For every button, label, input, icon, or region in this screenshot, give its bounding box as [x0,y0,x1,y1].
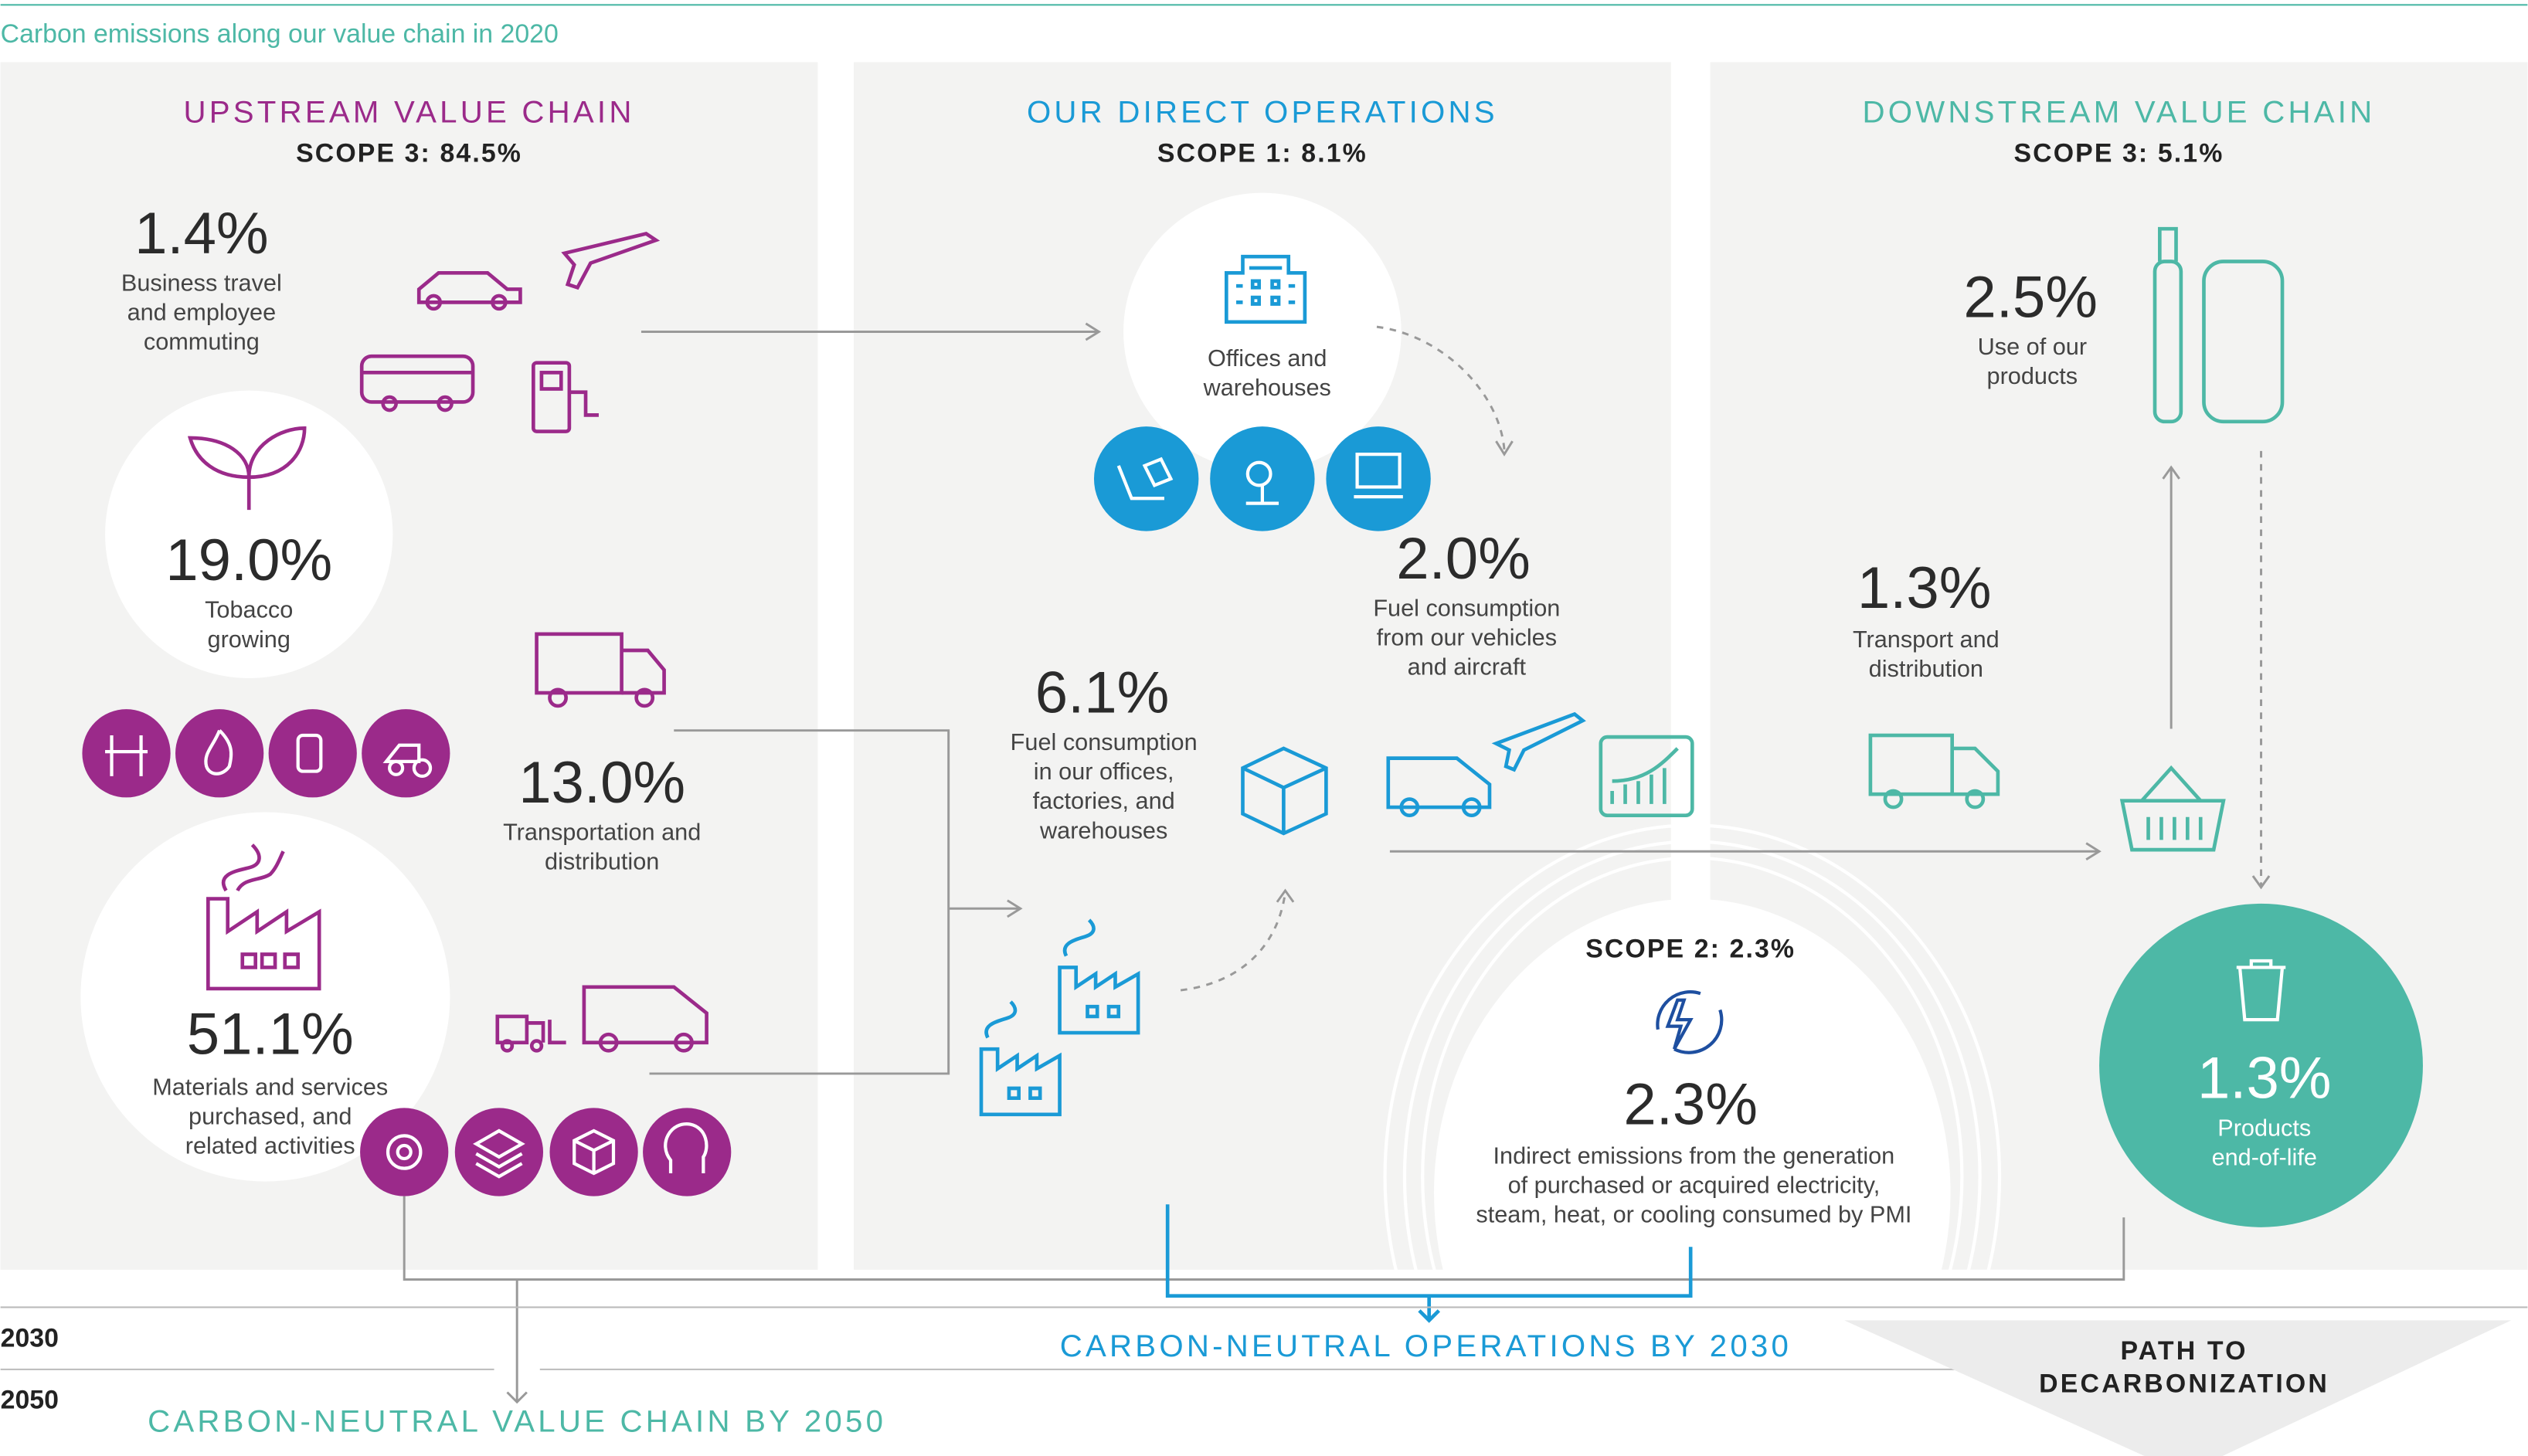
heading: upstream: UPSTREAM VALUE CHAIN [183,95,635,130]
stat: transport downstream: distribution [1869,656,1983,682]
path to decarbonization: DECARBONIZATION [2039,1369,2329,1398]
stat: fuel offices: factories, and [1033,788,1175,814]
circle: tobacco growing: 19.0% [165,528,332,593]
stat: transportation: 13.0% [518,750,685,816]
stat: fuel offices: in our offices, [1034,759,1174,785]
stat: business travel: and employee [127,300,276,326]
stat: fuel vehicles: and aircraft [1408,654,1526,680]
stat: business travel: commuting [144,329,260,355]
blue bracket to 2030 [1167,1204,1690,1320]
circle: offices: warehouses [1203,375,1331,401]
circle: end of life: Products [2217,1115,2311,1141]
heading: downstream: DOWNSTREAM VALUE CHAIN [1862,95,2375,130]
connector lines [650,731,1021,1074]
scope 2 text: 2.3% [1623,1072,1758,1138]
circle: materials: 51.1% [187,1002,354,1067]
stat: fuel vehicles: from our vehicles [1377,625,1557,651]
stat: fuel offices [1011,660,1198,843]
arrows downstream [2163,451,2269,888]
icons: vehicles small [498,987,707,1050]
stat: fuel vehicles: Fuel consumption [1373,596,1560,622]
heading: upstream [183,95,635,168]
scope 2 text: Indirect emissions from the generation [1493,1142,1894,1169]
icon: device [2155,229,2282,422]
stat: business travel: 1.4% [134,201,269,266]
circle: end of life: 1.3% [2197,1046,2332,1112]
circle: materials: purchased, and [189,1104,352,1130]
year labels [1,1323,59,1415]
stat: use of products [1963,264,2098,389]
heading: direct [1027,95,1498,168]
circle: tobacco growing [105,391,392,678]
icons: farming circles [82,709,450,797]
circle: tobacco growing: Tobacco [205,597,293,623]
path to decarbonization [1844,1320,2511,1456]
heading: direct: OUR DIRECT OPERATIONS [1027,95,1498,130]
scope 2 text [1476,935,1911,1227]
icon: basket [2122,768,2224,850]
scope 2 text: SCOPE 2: 2.3% [1585,935,1796,964]
arrow: travel to offices [641,324,1099,340]
dashed arrow factories [1181,891,1293,990]
year labels: 2050 [1,1386,59,1415]
stat: transport downstream [1853,555,2000,682]
panel: downstream [1711,62,2527,1270]
title: Carbon emissions along our value chain in 2020 [1,19,559,49]
heading: downstream [1862,95,2375,168]
path to decarbonization: PATH TO [2121,1336,2248,1366]
goal 2030: CARBON-NEUTRAL OPERATIONS BY 2030 [1060,1329,1792,1363]
stat: use of products: products [1987,363,2078,389]
panel: direct operations [854,62,1671,1270]
circle: materials: related activities [185,1133,355,1159]
icon: truck downstream [1871,735,1998,807]
stat: transportation: Transportation and [503,819,701,845]
stat: transport downstream: 1.3% [1857,555,1991,621]
circle: tobacco growing: growing [208,626,291,653]
stat: fuel offices: Fuel consumption [1011,729,1198,755]
heading: upstream: SCOPE 3: 84.5% [296,138,522,168]
heading: direct: SCOPE 1: 8.1% [1157,138,1368,168]
year labels: 2030 [1,1323,59,1352]
timeline [1,1307,2527,1369]
icon: truck upstream [537,634,664,706]
circle: offices [1123,193,1402,470]
stat: fuel offices: warehouses [1039,817,1167,843]
icons: blue circles [1094,426,1431,531]
stat: transportation: distribution [545,848,659,874]
circle: materials [80,812,450,1182]
circle: end of life [2099,904,2423,1227]
icons: travel [362,234,656,432]
stat: fuel offices: 6.1% [1035,660,1169,725]
dashed arrow [1377,327,1513,454]
heading: downstream: SCOPE 3: 5.1% [2013,138,2224,168]
stat: transport downstream: Transport and [1853,626,2000,653]
stat: use of products: 2.5% [1963,264,2098,330]
icons: direct ops vehicles [1242,714,1692,833]
stat: business travel [121,201,282,355]
arrow: to basket [1390,843,2099,860]
stat: transportation [503,750,701,874]
stat: fuel vehicles: 2.0% [1396,526,1531,592]
goal 2050: CARBON-NEUTRAL VALUE CHAIN BY 2050 [148,1403,886,1438]
stat: fuel vehicles [1373,526,1560,680]
stat: business travel: Business travel [121,270,282,297]
icons: materials circles [360,1108,731,1196]
icons: factories [981,920,1138,1115]
panel: upstream [1,62,817,1270]
circle: materials: Materials and services [152,1074,388,1100]
scope 2 circle [1374,825,2027,1456]
circle: end of life: end-of-life [2212,1144,2317,1170]
line: upstream to bottom [404,1196,2124,1402]
circle: offices: Offices and [1208,345,1327,372]
scope 2 text: of purchased or acquired electricity, [1508,1172,1880,1198]
stat: use of products: Use of our [1978,334,2087,360]
scope 2 text: steam, heat, or cooling consumed by PMI [1476,1201,1911,1227]
